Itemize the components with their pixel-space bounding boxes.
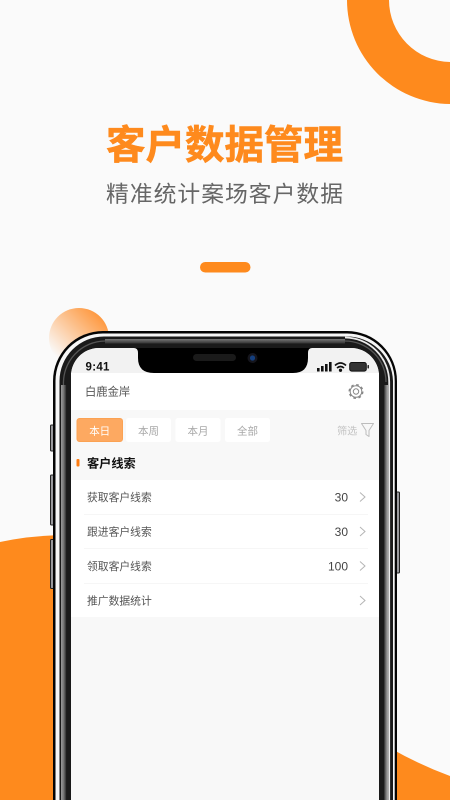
list row: claimed leads: [87, 559, 365, 574]
phone screen: [71, 348, 379, 800]
phone side buttons: [50, 425, 400, 588]
tab: all: 全部: [237, 424, 258, 438]
list row: promotion statistics: 推广数据统计: [87, 594, 152, 608]
list row: promotion statistics: [87, 594, 365, 608]
tab: this month: [176, 418, 220, 442]
icon: settings gear: [349, 385, 363, 398]
list row: acquired leads: 30: [335, 490, 348, 504]
list row: claimed leads: 100: [328, 560, 348, 574]
section heading: 客户线索: [87, 456, 136, 470]
subtitle: 精准统计案场客户数据: [106, 181, 344, 207]
status icon: battery: [350, 362, 369, 371]
list row: acquired leads: 获取客户线索: [87, 490, 152, 504]
list row: followed leads: 跟进客户线索: [87, 524, 152, 538]
list background: [71, 480, 379, 617]
notch: [134, 348, 312, 373]
filter label: 筛选: [337, 424, 357, 438]
status icon: signal: [317, 362, 332, 372]
tab: this month: 本月: [188, 424, 208, 438]
decorative faded circle: [49, 308, 109, 368]
status time: 9:41: [86, 362, 110, 374]
title: 客户数据管理: [106, 124, 343, 168]
accent pill: [200, 262, 250, 272]
orange blob: bottom left: [0, 535, 60, 800]
decorative ring: top right: [347, 0, 450, 104]
notch camera: [248, 353, 258, 363]
tab: this week: 本周: [138, 424, 159, 438]
tab: today active: [77, 418, 122, 442]
phone frame: [53, 331, 397, 800]
tab: all: [225, 418, 270, 442]
tab: this week: [126, 418, 171, 442]
tab: today active: 本日: [89, 424, 110, 438]
list row: followed leads: [87, 524, 365, 539]
notch speaker: [193, 354, 236, 361]
orange blob: bottom right: [390, 748, 450, 800]
app header bar: [71, 373, 379, 410]
icon: filter funnel: [362, 424, 374, 436]
status bar background: [71, 348, 379, 376]
list row: acquired leads: [87, 490, 365, 504]
project name: 白鹿金岸: [85, 384, 130, 398]
list row: claimed leads: 领取客户线索: [87, 559, 152, 573]
status icon: wifi: [335, 363, 346, 371]
section marker: [76, 459, 80, 466]
list row: followed leads: 30: [335, 525, 348, 539]
phone mockup: [50, 331, 400, 800]
